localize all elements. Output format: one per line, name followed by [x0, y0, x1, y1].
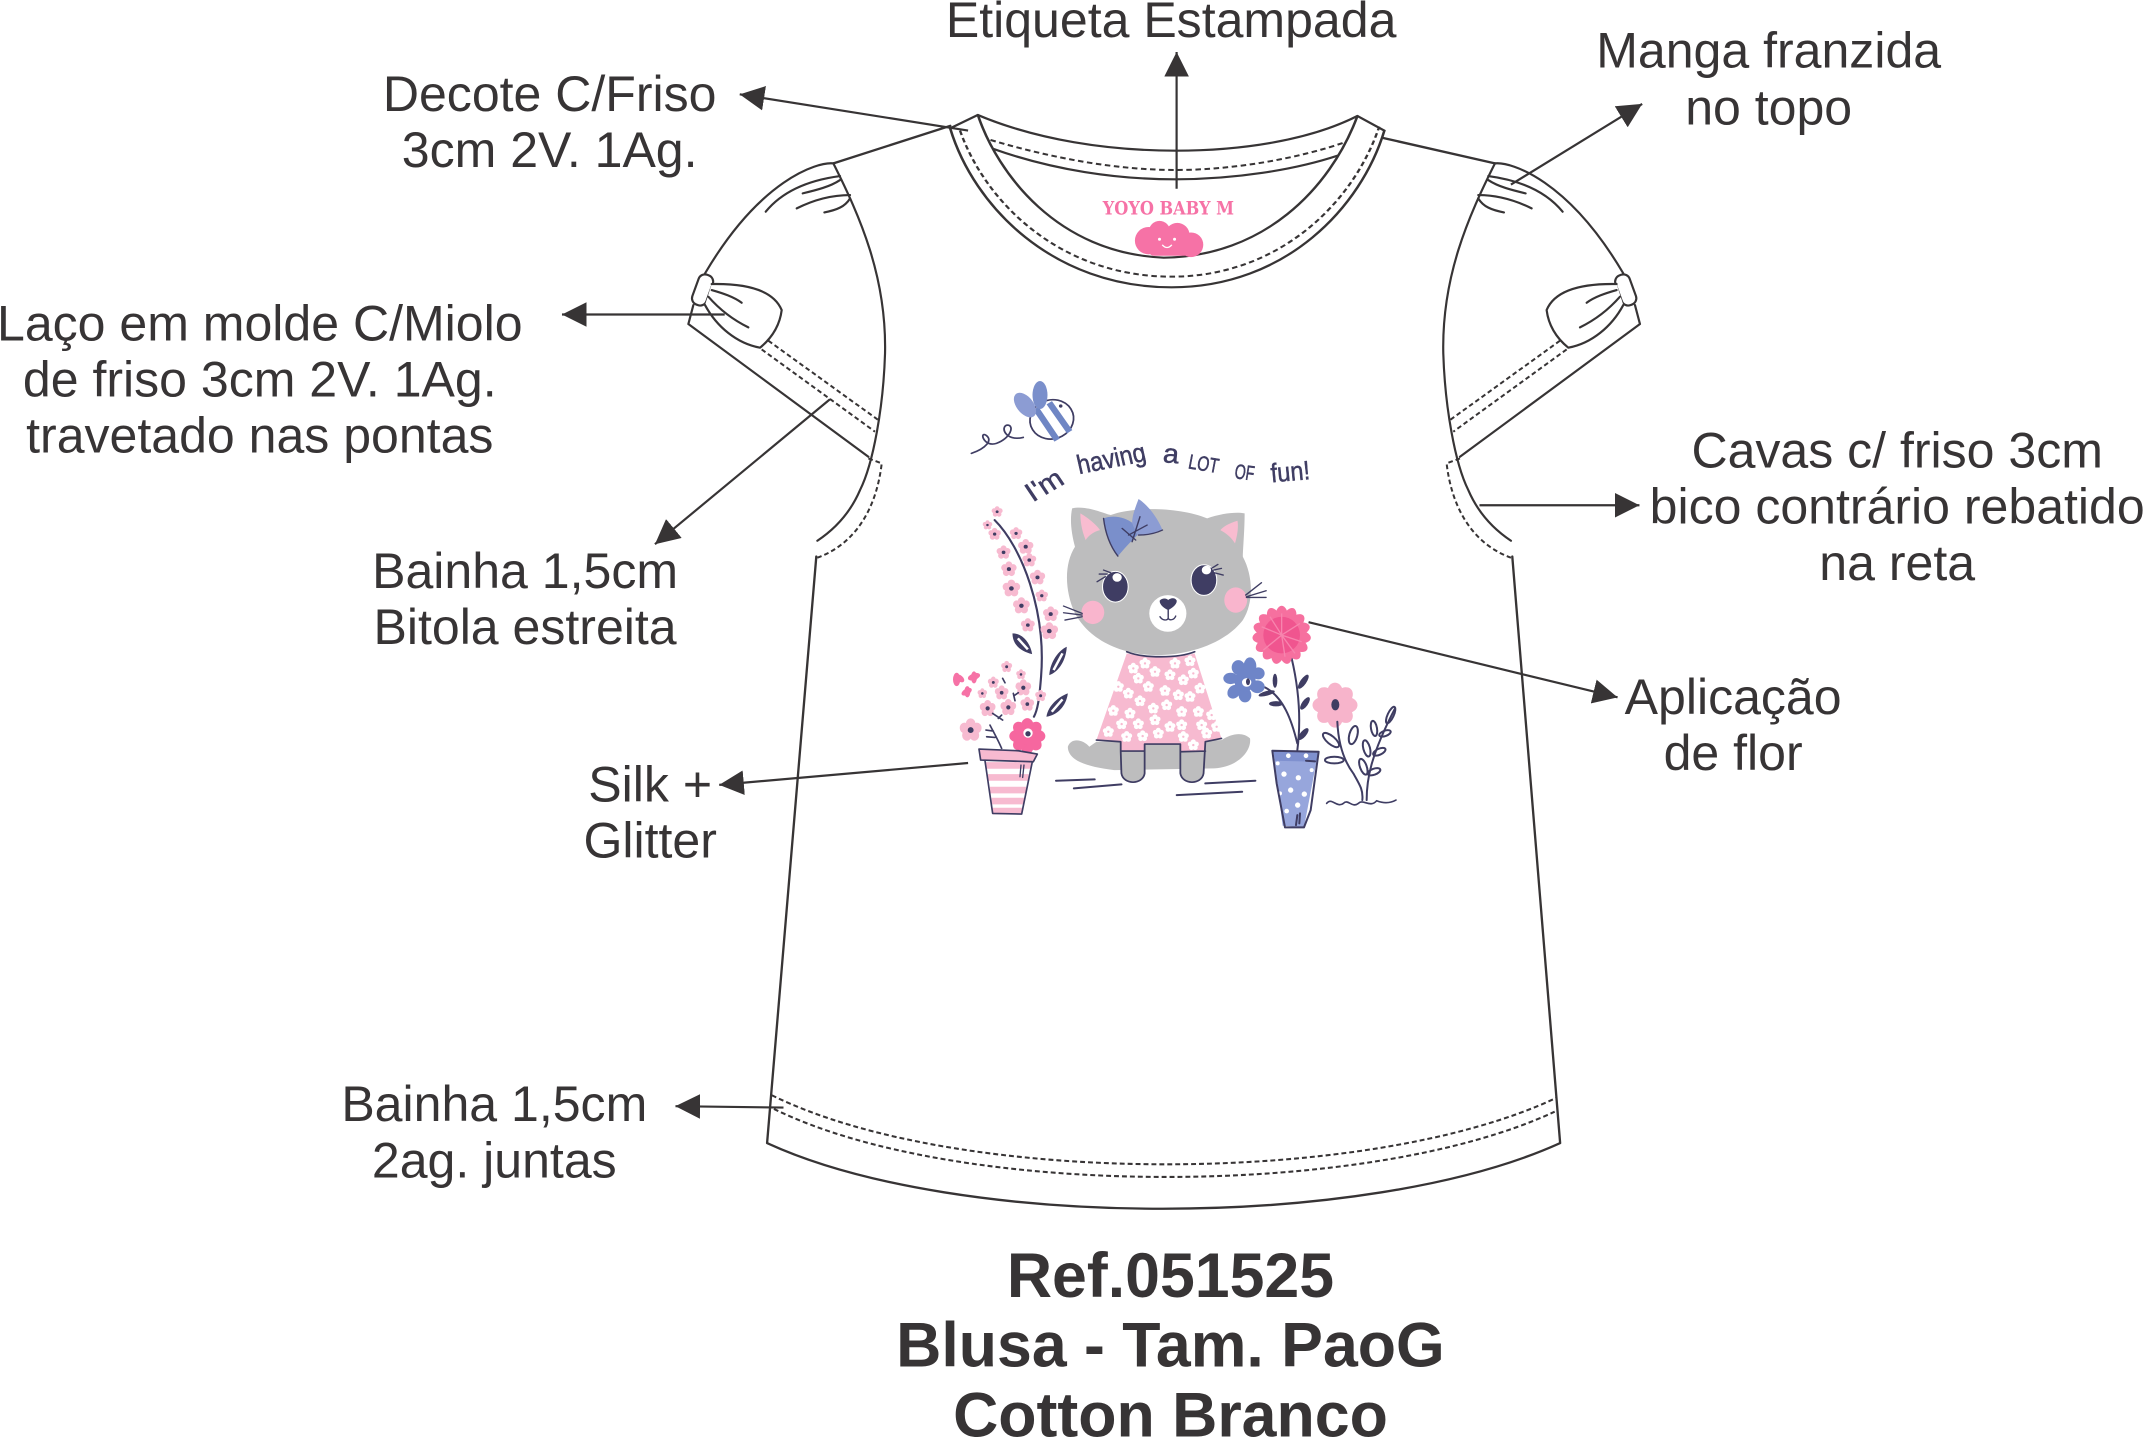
callout: Manga franzida: Manga franzida	[1596, 23, 1941, 79]
striped pot	[979, 749, 1037, 814]
label text: YOYO BABY M	[1102, 199, 1234, 220]
callout: Laco: travetado nas pontas	[26, 408, 493, 464]
light pink flower	[1312, 683, 1357, 728]
callout: Bainha barra	[341, 1076, 647, 1188]
head	[1067, 508, 1251, 655]
small pink flowers	[960, 661, 1046, 741]
callout: Cavas: na reta	[1819, 535, 1975, 591]
slogan text: LOT	[1187, 450, 1221, 478]
potted bouquet	[953, 661, 1046, 814]
neck collar	[950, 115, 1384, 287]
callout: Silk: Glitter	[583, 812, 717, 868]
callout: Silk	[583, 756, 717, 868]
neck label: YOYO BABY M with cloud	[1102, 199, 1234, 257]
hair bow	[1104, 499, 1162, 556]
callout: Aplicacao	[1625, 669, 1842, 781]
callout: Laco: Laço em molde C/Miolo	[0, 295, 523, 351]
slogan text: fun!	[1269, 455, 1311, 488]
arrow: manga	[1511, 104, 1642, 185]
body and legs	[1068, 734, 1250, 770]
dahlia	[1252, 606, 1312, 665]
ground squiggle	[1327, 800, 1396, 805]
callout: Aplicacao: Aplicação	[1625, 669, 1842, 725]
callout: Bainha barra: 2ag. juntas	[372, 1132, 617, 1188]
body outline and hem	[767, 557, 1560, 1209]
collar	[1127, 652, 1195, 657]
kitten	[1056, 499, 1266, 795]
callout: Bainha manga: Bainha 1,5cm	[372, 543, 678, 599]
hot pink blossoms	[953, 671, 981, 697]
title block: Blusa - Tam. PaoG	[896, 1311, 1445, 1381]
arrow: cavas	[1479, 504, 1639, 506]
title block	[896, 1241, 1445, 1438]
callout: Bainha manga: Bitola estreita	[373, 599, 677, 655]
callout: Decote: 3cm 2V. 1Ag.	[402, 122, 698, 178]
ground strokes	[1056, 779, 1255, 795]
callout: Cavas: bico contrário rebatido	[1650, 479, 2144, 535]
arrow: aplicacao	[1309, 622, 1618, 697]
artwork: kitten print	[953, 381, 1397, 827]
arrow: bainha barra	[675, 1106, 783, 1108]
callout: Cavas: Cavas c/ friso 3cm	[1691, 423, 2103, 479]
twigs	[986, 678, 1018, 748]
arrow: decote	[740, 94, 968, 131]
callout: Cavas	[1650, 423, 2144, 591]
muzzle	[1149, 595, 1186, 632]
shoulder lines	[833, 126, 1495, 163]
left sleeve	[688, 163, 885, 558]
callout: Silk: Silk +	[588, 756, 712, 812]
callout: Bainha barra: Bainha 1,5cm	[341, 1076, 647, 1132]
arrow: etiqueta	[1176, 52, 1178, 189]
callout: Manga franzida	[1596, 23, 1941, 135]
eyes	[1097, 564, 1223, 602]
big pink flower	[1009, 718, 1045, 754]
callout: Decote: Decote C/Friso	[383, 66, 716, 122]
icon: smiling cloud	[1135, 221, 1203, 257]
callout: Bainha manga	[372, 543, 678, 655]
ears	[1080, 513, 1238, 543]
sprigs	[1321, 706, 1397, 800]
slogan text: OF	[1233, 460, 1256, 485]
tall stem flowers	[983, 506, 1058, 639]
callout: Decote	[383, 66, 716, 178]
left plant	[953, 506, 1068, 814]
callout: Aplicacao: de flor	[1664, 725, 1803, 781]
slogan text: having	[1074, 437, 1149, 480]
leaves	[1012, 633, 1068, 717]
callout: Laco: de friso 3cm 2V. 1Ag.	[23, 352, 497, 408]
arrow: laco	[562, 313, 725, 315]
callout: Manga franzida: no topo	[1685, 79, 1852, 135]
polka dot vase	[1272, 751, 1319, 827]
blue flower	[1223, 657, 1265, 702]
garment: t-shirt flat sketch	[688, 115, 1640, 1209]
right sleeve	[1443, 163, 1640, 558]
arrow: bainha manga	[655, 399, 830, 544]
dress flowers	[1103, 655, 1222, 750]
callout: Laco	[0, 295, 523, 464]
arrow: silk	[719, 763, 968, 785]
slogan text: I'm	[1019, 463, 1069, 507]
right plant with dahlia, blue flower and vase	[1223, 606, 1397, 827]
bee and trail	[971, 381, 1081, 453]
slogan text	[1019, 437, 1311, 507]
title block: Ref.051525	[1007, 1241, 1334, 1311]
whiskers	[1064, 583, 1266, 620]
slogan text: a	[1162, 438, 1181, 469]
dress	[1096, 653, 1221, 752]
dress and leg outlines	[1096, 738, 1221, 782]
stem leaves	[1258, 673, 1312, 742]
cheeks	[1081, 587, 1247, 624]
